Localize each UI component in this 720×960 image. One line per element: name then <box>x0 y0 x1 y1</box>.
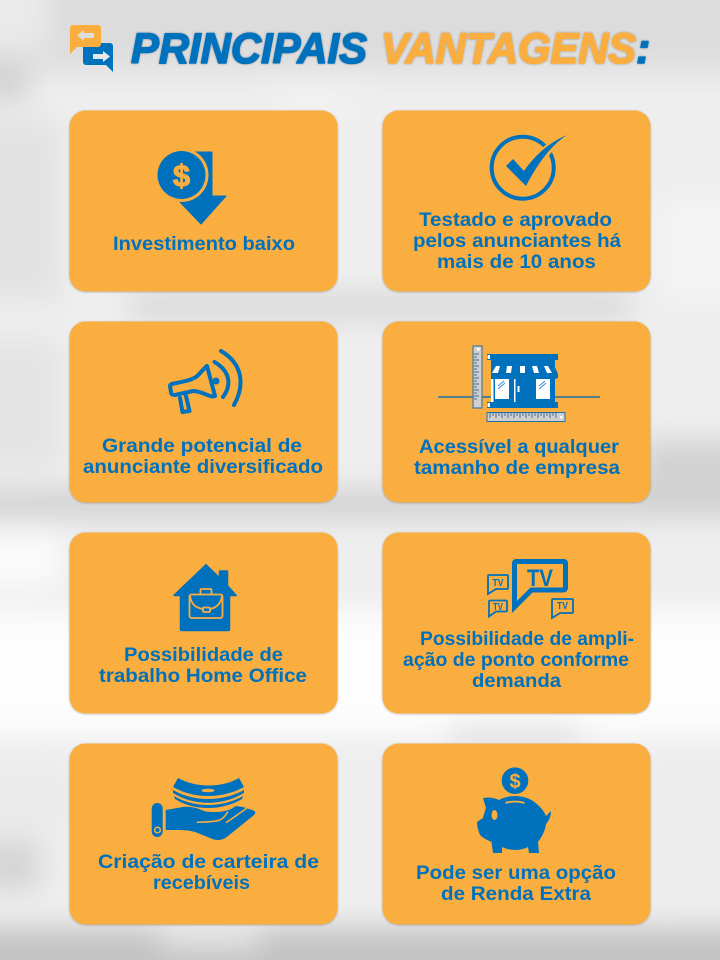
label: Testado e aprovado <box>419 209 612 231</box>
panel: grande potencial <box>70 322 338 502</box>
label: Pode ser uma opção <box>416 862 616 884</box>
label <box>403 628 634 692</box>
label <box>416 862 616 905</box>
panel: ampliacao <box>382 532 650 714</box>
label <box>413 209 621 273</box>
icon: hand with money <box>152 778 255 840</box>
label: Possibilidade de ampli- <box>420 628 634 650</box>
icon: chat arrows <box>70 25 113 72</box>
icon: storefront with rulers <box>438 346 600 422</box>
label: ação de ponto conforme <box>403 649 629 671</box>
label <box>83 435 323 478</box>
heading text: PRINCIPAIS <box>131 25 367 73</box>
panel: carteira de recebiveis <box>70 744 338 924</box>
label <box>414 436 620 479</box>
icon: check in circle <box>492 135 567 199</box>
icon: dollar down arrow: $ <box>173 158 190 193</box>
label: de Renda Extra <box>441 883 591 905</box>
heading text: VANTAGENS <box>381 25 636 73</box>
icon: TV speech bubbles: TV <box>557 600 568 612</box>
panel: acessivel <box>382 322 650 502</box>
heading text: : <box>636 25 650 73</box>
icon: piggy bank: $ <box>509 771 521 793</box>
label: Acessível a qualquer <box>419 436 619 458</box>
icon: TV speech bubbles <box>488 562 573 618</box>
icon: TV speech bubbles: TV <box>527 565 553 592</box>
label: trabalho Home Office <box>99 665 307 687</box>
icon: TV speech bubbles: TV <box>493 602 503 613</box>
label: anunciante diversificado <box>83 456 323 478</box>
title <box>70 25 650 73</box>
label: mais de 10 anos <box>437 251 596 273</box>
label: demanda <box>472 670 561 692</box>
icon: TV speech bubbles: TV <box>492 577 504 589</box>
icon: house with briefcase <box>174 564 237 631</box>
label: Grande potencial de <box>102 435 302 457</box>
label: recebíveis <box>153 872 250 894</box>
label <box>98 851 319 894</box>
label: pelos anunciantes há <box>413 230 621 252</box>
panel: testado e aprovado <box>382 110 650 292</box>
panel: renda extra <box>382 744 650 924</box>
icon: megaphone <box>170 351 241 412</box>
label: Possibilidade de <box>124 644 283 666</box>
label: Criação de carteira de <box>98 851 319 873</box>
panel: investimento baixo <box>70 110 338 292</box>
icon: piggy bank <box>477 767 551 853</box>
icon: dollar down arrow <box>154 148 226 224</box>
label <box>99 644 307 687</box>
label: Investimento baixo <box>113 233 295 255</box>
panel: home office <box>70 532 338 714</box>
label: tamanho de empresa <box>414 457 620 479</box>
